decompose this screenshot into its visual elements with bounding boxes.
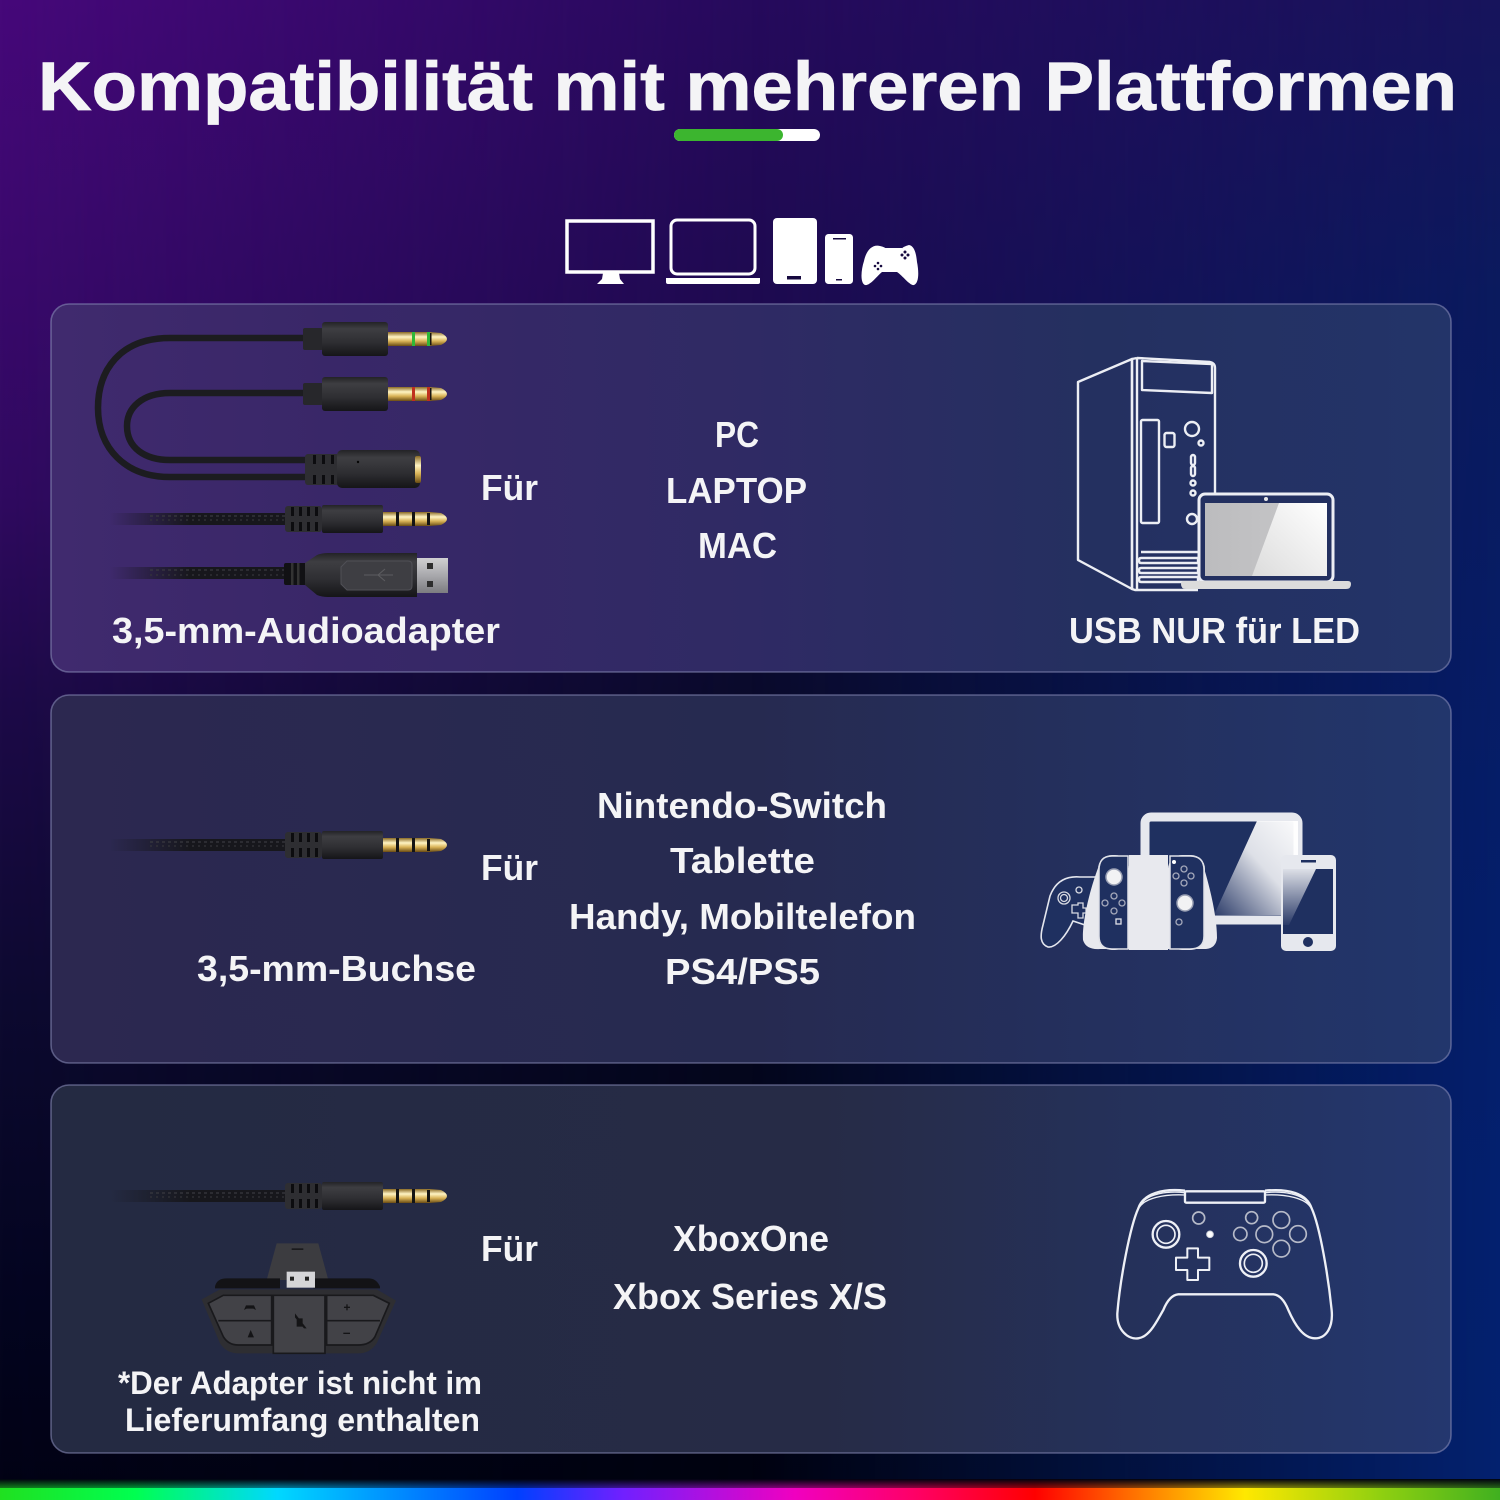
- platform list: [569, 785, 916, 992]
- platform list: [613, 1218, 887, 1317]
- small controller: [1041, 877, 1100, 947]
- panel: Switch, tablet, phone, PS: [51, 695, 1451, 1063]
- label: Für: Für: [481, 1228, 538, 1269]
- device icons row: [567, 218, 918, 285]
- 3.5 mm jack cable: [110, 1182, 447, 1210]
- 4-pole jack cable: [110, 505, 447, 533]
- USB plug cable: [110, 553, 448, 597]
- jack with red rings: [303, 377, 447, 411]
- phone: [1281, 855, 1336, 951]
- icon: monitor: [567, 221, 653, 284]
- platform list: XboxOne: [673, 1218, 829, 1259]
- icon: laptop: [666, 220, 760, 284]
- 3.5 mm socket: [305, 450, 421, 488]
- icon: game controller: [862, 245, 918, 285]
- jack with green rings: [303, 322, 447, 356]
- adapter note: *Der Adapter ist nicht im: [118, 1365, 482, 1401]
- Xbox stereo headset adapter: [202, 1243, 396, 1353]
- label: 3,5-mm-Buchse: 3,5-mm-Buchse: [197, 948, 476, 989]
- icon: phone: [825, 234, 853, 284]
- title underline progress bar: [674, 129, 820, 141]
- audio adapter and USB cables: [98, 322, 448, 597]
- label: USB NUR für LED: USB NUR für LED: [1069, 610, 1360, 651]
- platform list: PC: [715, 414, 759, 455]
- platform list: [666, 414, 807, 566]
- platform list: Nintendo-Switch: [597, 785, 887, 826]
- icon: tablet: [773, 218, 817, 284]
- Switch with grip: [1083, 855, 1217, 950]
- platform list: LAPTOP: [666, 470, 807, 511]
- icon: controller, Switch, tablet and phone: [1041, 817, 1336, 951]
- tablet: [1145, 817, 1298, 920]
- panel: PC / laptop / Mac: [51, 304, 1451, 672]
- platform list: Tablette: [670, 840, 815, 881]
- icon: game controller outline: [1117, 1190, 1332, 1338]
- title: Kompatibilität mit mehreren Plattformen: [38, 48, 1457, 125]
- panel: Xbox: [51, 1085, 1451, 1453]
- label: 3,5-mm-Audioadapter: 3,5-mm-Audioadapter: [112, 610, 500, 651]
- label: Für: Für: [481, 847, 538, 888]
- rainbow light strip: [0, 1479, 1500, 1500]
- platform list: Xbox Series X/S: [613, 1276, 887, 1317]
- platform list: Handy, Mobiltelefon: [569, 896, 916, 937]
- label: Für: Für: [481, 467, 538, 508]
- adapter note: [118, 1365, 482, 1438]
- platform list: MAC: [698, 525, 777, 566]
- 3.5 mm jack cable: [110, 831, 447, 859]
- platform list: PS4/PS5: [665, 951, 820, 992]
- icon: PC tower and laptop: [1078, 358, 1351, 590]
- adapter note: Lieferumfang enthalten: [125, 1402, 480, 1438]
